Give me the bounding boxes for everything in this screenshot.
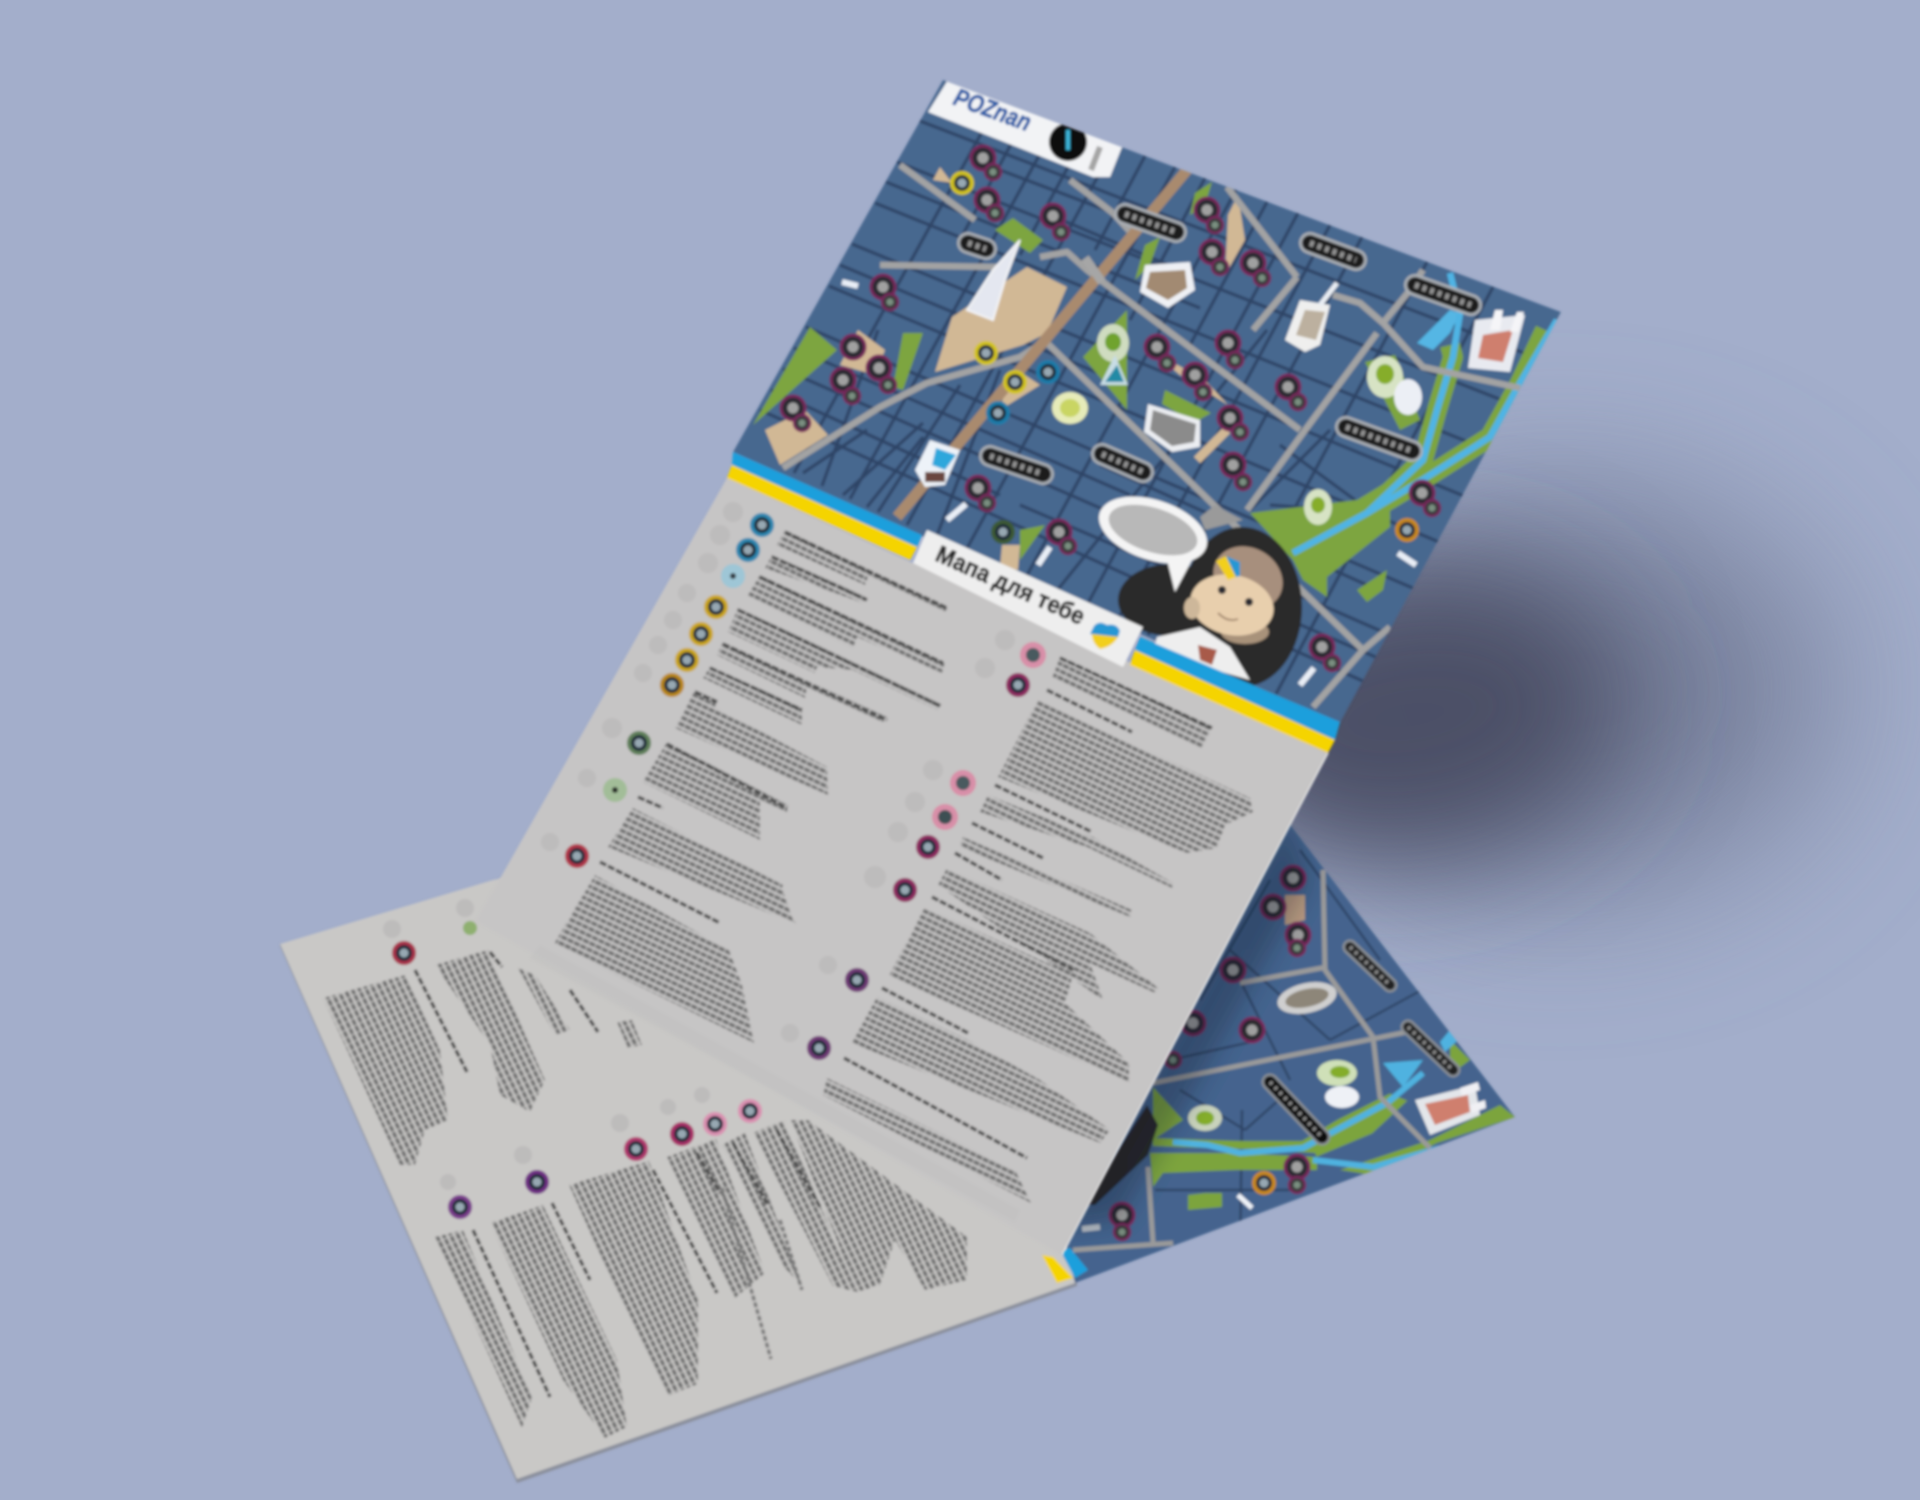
- faint shade near bottom margin: [530, 945, 1020, 1222]
- lower sheet paper: [280, 760, 1100, 1479]
- lower map pins: [1110, 866, 1310, 1240]
- title label: [913, 530, 1143, 667]
- gray roads: [783, 165, 1520, 707]
- round black badge: [1049, 123, 1087, 161]
- plaza and tan blocks: [765, 167, 1245, 570]
- lower sheet map panel: [1066, 825, 1516, 1284]
- street grid: [760, 101, 1537, 694]
- sheet edge highlight: [1062, 753, 1328, 1255]
- sheet edge thickness: [280, 943, 1077, 1483]
- parks: [753, 182, 1420, 602]
- tan road by gray building: [1197, 430, 1227, 460]
- gray road over avenue crossing: [1085, 258, 1102, 282]
- lower map buildings and icons: [1082, 977, 1486, 1229]
- dark hair backdrop: [1182, 527, 1302, 687]
- upper sheet paper: [476, 478, 1328, 1255]
- gray road piece above character: [1200, 505, 1243, 530]
- title text: Мапа для тебе: [932, 541, 1089, 631]
- hair: [1202, 534, 1294, 622]
- legend pins right column: [809, 642, 1046, 1058]
- face: [1185, 567, 1279, 643]
- tie: [1198, 645, 1217, 665]
- lower sheet legend pins: [383, 899, 760, 1217]
- lower map name labels: [1270, 947, 1453, 1137]
- building icons: [915, 262, 1525, 525]
- black street labels: [968, 214, 1471, 474]
- drop shadow of the upper sheet: [1177, 490, 1830, 890]
- text column right: [823, 657, 1253, 1203]
- lower map parks: [1150, 1040, 1515, 1210]
- yellow and blue bands: [727, 452, 1340, 753]
- white church on plaza: [967, 240, 1020, 320]
- text column left: [554, 530, 948, 1043]
- ribbon in yellow and blue: [1216, 556, 1240, 580]
- eyes: [1218, 586, 1226, 594]
- lower map streets: [1154, 850, 1420, 1222]
- pale legend icons: [541, 502, 1015, 1042]
- sheet: lower leaflet lying flat: [280, 760, 1515, 1483]
- shirt: [1155, 627, 1250, 680]
- ear: [1184, 597, 1200, 619]
- brown avenue: [897, 170, 1187, 517]
- shade on lower map cast by upper sheet: [1076, 826, 1314, 1234]
- speech bubble: [1090, 484, 1216, 592]
- map panel: [733, 80, 1561, 723]
- lower sheet text blocks: [323, 950, 967, 1438]
- small white arrows: [842, 282, 1416, 685]
- lower map roads: [1073, 870, 1430, 1250]
- lower sheet yellow stripe: [1042, 1255, 1073, 1283]
- legend pins left column: [567, 515, 772, 866]
- woman's dark circle behind the upper sheet: [1082, 1105, 1158, 1205]
- header logo bar: [928, 80, 1122, 177]
- river: [1293, 273, 1557, 553]
- logo wordmark: POZnan: [950, 83, 1035, 137]
- small gray note in badge bar: [1091, 147, 1100, 170]
- woman illustration: [1090, 484, 1302, 687]
- ukraine heart flag: [1090, 623, 1120, 649]
- sheet: upper leaflet: [476, 80, 1561, 1255]
- lower sheet blue stripe: [1060, 1248, 1088, 1278]
- lower map river: [1173, 1073, 1440, 1167]
- map ground: [733, 80, 1561, 723]
- river banks: [1367, 330, 1545, 513]
- chin shadow: [1221, 620, 1269, 644]
- smile: [1218, 613, 1238, 620]
- map pins: [781, 146, 1440, 671]
